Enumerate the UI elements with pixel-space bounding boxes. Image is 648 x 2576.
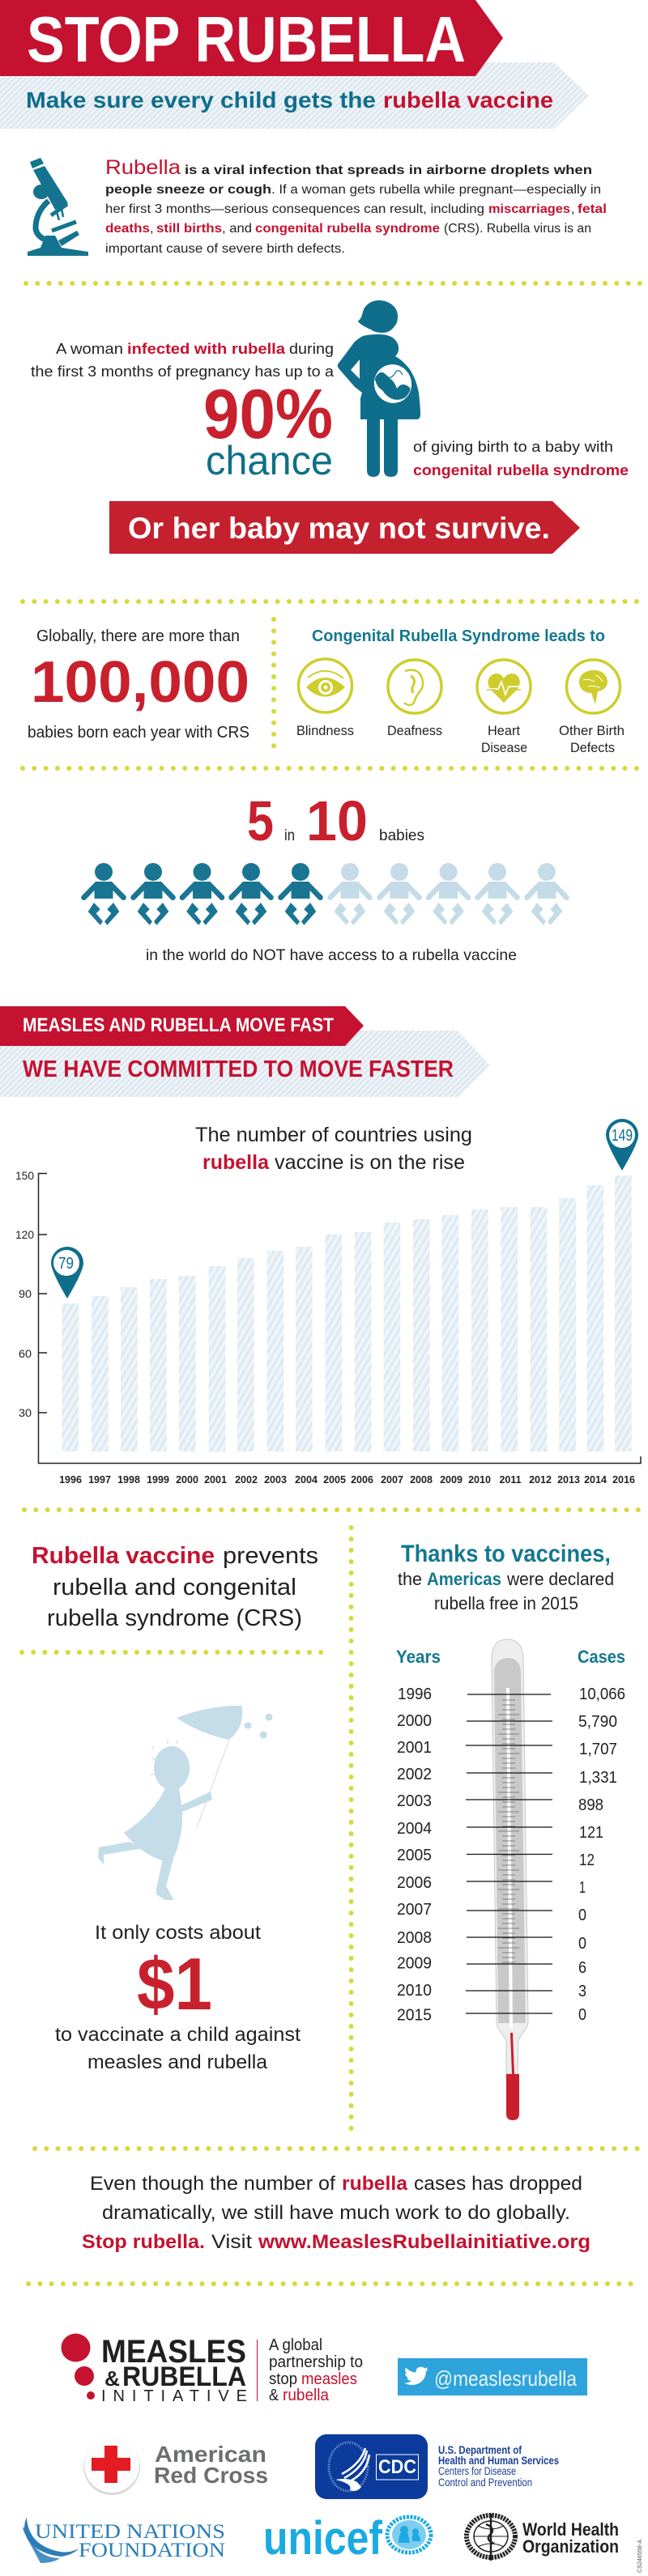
y axis labels	[15, 1169, 34, 1419]
logo: HHS CDC: Health and Human Services	[438, 2454, 559, 2467]
year column: 2004	[397, 1820, 432, 1838]
panel: global count	[28, 627, 249, 742]
icon: twitter bird	[404, 2367, 428, 2385]
year column	[397, 1685, 432, 2024]
logo: American Red Cross: American	[155, 2442, 266, 2467]
word: Rubella: Rubella	[105, 156, 181, 179]
year column: 2010	[397, 1982, 432, 2000]
WHO emblem	[467, 2514, 515, 2561]
subtitle text: Make sure every child gets the	[26, 87, 376, 113]
icon: pregnant woman	[338, 300, 420, 477]
chart title	[195, 1124, 472, 1174]
year column: 2009	[397, 1954, 432, 1972]
cases column: 0	[578, 1906, 586, 1924]
y axis labels: 120	[15, 1228, 34, 1241]
column heading: Cases: Cases	[578, 1647, 625, 1667]
logo: unicef: unicef	[263, 2512, 383, 2565]
intro paragraph: deaths	[105, 222, 150, 236]
unicef emblem	[387, 2517, 431, 2553]
section ribbon: committed to move faster	[0, 1031, 490, 1097]
chart title: rubella	[202, 1151, 270, 1174]
word: chance: chance	[206, 438, 333, 483]
intro paragraph: ,	[571, 202, 574, 216]
panel: vaccine prevents	[32, 1543, 318, 1631]
heading: Congenital Rubella Syndrome leads to	[312, 627, 605, 645]
intro paragraph: ,	[150, 222, 153, 236]
logo: HHS CDC: Centers for Disease	[438, 2464, 516, 2477]
babies with access	[327, 863, 569, 925]
statistic: 5 in 10 babies: 10	[306, 789, 368, 852]
cases column: 1,331	[579, 1769, 617, 1787]
cases column: 12	[579, 1851, 595, 1869]
icon: heart	[477, 660, 531, 713]
panel: vaccine prevents: Rubella vaccine	[32, 1543, 215, 1569]
illustration: child with butterfly net	[98, 1706, 272, 1900]
partnership tagline: partnership to	[269, 2353, 363, 2371]
twitter handle	[398, 2358, 587, 2395]
x axis labels: 2016	[612, 1474, 635, 1486]
red banner: may not survive	[109, 501, 580, 554]
icon labels: Other Birth	[559, 723, 625, 738]
HHS eagle	[335, 2448, 369, 2491]
x axis labels: 2013	[557, 1474, 580, 1486]
y axis labels: 60	[19, 1347, 32, 1360]
intro paragraph: . If a woman gets rubella while pregnant—especially in	[271, 183, 601, 197]
logo: World Health Organization	[467, 2514, 619, 2561]
cases column	[578, 1685, 625, 2024]
cost text: to vaccinate a child against	[55, 2024, 301, 2046]
year column: 2002	[397, 1766, 432, 1783]
cases column: 898	[578, 1796, 603, 1814]
panel: congenital rubella syndrome effects	[296, 627, 625, 755]
partnership tagline: rubella	[283, 2387, 330, 2404]
risk text: woman infected: A woman	[56, 340, 123, 357]
red banner: may not survive: Or her baby may not survive.	[128, 512, 550, 545]
cases column: 1	[579, 1879, 586, 1897]
panel: vaccine prevents: prevents	[223, 1543, 318, 1569]
section banner: measles and rubella move fast: MEASLES AND RUBELLA MOVE FAST	[23, 1014, 334, 1036]
chart title: The number of countries using	[195, 1124, 472, 1146]
big number: 100,000: 100,000	[31, 650, 249, 715]
partnership tagline: stop	[269, 2370, 297, 2388]
year column: 2008	[397, 1929, 432, 1947]
icon: ear	[388, 660, 441, 713]
x axis labels: 2002	[235, 1474, 258, 1486]
risk text: woman infected: infected with rubella	[127, 340, 286, 357]
logo: United Nations Foundation	[23, 2517, 225, 2563]
intro paragraph: important cause of severe birth defects.	[105, 242, 345, 256]
icon labels	[296, 723, 625, 755]
panel: vaccine prevents: rubella syndrome (CRS)	[47, 1605, 302, 1631]
logo: Measles and Rubella Initiative: RUBELLA	[122, 2361, 246, 2392]
intro paragraph: miscarriages	[488, 202, 570, 216]
intro paragraph: people sneeze or cough	[105, 183, 271, 197]
cases column: 6	[578, 1959, 586, 1977]
icon labels: Defects	[570, 740, 615, 755]
closing message: www.MeaslesRubellainitiative.org	[258, 2231, 590, 2253]
panel: Americas rubella free: the	[398, 1569, 422, 1589]
intro paragraph: fetal	[578, 202, 607, 216]
year column: 2006	[397, 1874, 432, 1892]
x axis labels: 2003	[264, 1474, 287, 1486]
cases column: 10,066	[579, 1685, 625, 1703]
closing message: Even though the number of	[90, 2173, 335, 2195]
pin: 79	[51, 1247, 83, 1299]
cases column: 1,707	[579, 1741, 617, 1758]
intro paragraph: congenital rubella syndrome	[255, 222, 440, 236]
partnership tagline: A global	[269, 2336, 322, 2354]
cases column: 121	[579, 1824, 603, 1842]
fetus in womb	[369, 359, 417, 408]
closing message	[82, 2173, 590, 2253]
year column: 2005	[397, 1847, 432, 1864]
x axis labels: 2010	[468, 1474, 491, 1486]
partnership tagline: measles	[301, 2370, 357, 2388]
x axis labels: 2014	[584, 1474, 607, 1486]
thermometer table	[396, 1639, 625, 2120]
title text: STOP RUBELLA	[27, 3, 466, 75]
section banner: measles and rubella move fast	[0, 1006, 364, 1046]
x axis labels: 2007	[381, 1474, 403, 1486]
logo: United Nations Foundation: UNITED NATIONS	[35, 2521, 225, 2543]
logo: HHS CDC: U.S. Department of	[438, 2443, 522, 2456]
panel: vaccine prevents: rubella and congenital	[53, 1575, 296, 1600]
year column: 2003	[397, 1792, 432, 1810]
risk text: birth outcome: congenital rubella syndrome	[413, 461, 629, 478]
bar chart: countries using rubella vaccine	[15, 1119, 641, 1486]
panel: Americas rubella free: Americas	[427, 1569, 501, 1589]
icon: brain	[567, 660, 620, 713]
y axis labels: 150	[15, 1169, 34, 1182]
cases column: 0	[578, 2006, 586, 2024]
scale lines	[466, 1694, 552, 2013]
pictogram: ten babies	[81, 863, 569, 925]
icon labels: Deafness	[387, 723, 442, 738]
intro paragraph	[105, 156, 607, 256]
risk text: woman infected: the first 3 months of pregnancy has up to a	[31, 363, 335, 380]
cases column: 0	[578, 1935, 586, 1953]
logo: Measles and Rubella Initiative	[62, 2333, 363, 2405]
icon labels: Heart	[488, 723, 520, 738]
panel: global count: babies born each year with CRS	[28, 724, 249, 742]
closing message: cases has dropped	[414, 2173, 582, 2195]
logo: Measles and Rubella Initiative: &	[104, 2366, 120, 2391]
cost text	[55, 1922, 301, 2073]
risk text: birth outcome: of giving birth to a baby with	[413, 438, 613, 455]
partnership tagline	[269, 2336, 363, 2404]
intro paragraph: (CRS). Rubella virus is an	[444, 222, 591, 236]
logo: United Nations Foundation: FOUNDATION	[79, 2540, 225, 2561]
year column: 2001	[397, 1739, 432, 1757]
big number: 90%: 90%	[203, 376, 333, 453]
x axis labels: 2011	[499, 1474, 522, 1486]
year column: 1996	[398, 1685, 432, 1703]
statistic: 5 in 10 babies: in	[284, 827, 295, 844]
logo: HHS CDC: Control and Prevention	[438, 2476, 532, 2489]
logo: HHS CDC	[315, 2434, 559, 2499]
pin: 79: 79	[58, 1255, 74, 1273]
CDC mark: CDC	[378, 2456, 416, 2478]
document code: CS246558-A	[636, 2540, 643, 2573]
intro paragraph: still births	[156, 222, 222, 236]
intro paragraph: is a viral infection that spreads in airborne droplets when	[185, 164, 592, 177]
year column: 2000	[397, 1712, 432, 1730]
y axis labels: 90	[19, 1287, 32, 1300]
x axis labels: 2006	[351, 1474, 373, 1486]
x axis labels: 2000	[176, 1474, 198, 1486]
panel: global count: Globally, there are more than	[36, 627, 240, 645]
closing message: Visit	[211, 2231, 252, 2253]
icon labels: Disease	[481, 740, 527, 755]
column heading: Years: Years	[396, 1647, 441, 1667]
bars	[62, 1175, 632, 1452]
closing message: dramatically, we still have much work to do globally.	[102, 2202, 570, 2224]
cases column: 5,790	[578, 1713, 617, 1731]
logo: American Red Cross: Red Cross	[154, 2463, 268, 2488]
subtitle text: rubella vaccine	[383, 87, 553, 113]
cost text: It only costs about	[95, 1922, 261, 1944]
logo: World Health Organization: World Health	[522, 2519, 619, 2540]
logo: Measles and Rubella Initiative: MEASLES	[101, 2334, 246, 2370]
panel: Americas rubella free: rubella free in 2015	[434, 1593, 578, 1613]
intro paragraph: her first 3 months—serious consequences can result, including	[105, 202, 484, 216]
twitter handle: @measlesrubella	[434, 2366, 577, 2391]
panel: Americas rubella free: Thanks to vaccines,	[401, 1541, 611, 1567]
statistic: 5 in 10 babies	[247, 789, 424, 852]
partnership tagline: &	[269, 2387, 279, 2404]
x axis labels: 2004	[295, 1474, 318, 1486]
x axis labels: 1998	[117, 1474, 140, 1486]
chart title: vaccine is on the rise	[275, 1151, 465, 1174]
icon: microscope	[28, 158, 88, 256]
statistic: 5 in 10 babies: babies	[379, 827, 424, 844]
subtitle ribbon	[0, 62, 589, 129]
panel: Americas rubella free: were declared	[506, 1569, 614, 1589]
icon: eye	[298, 659, 352, 712]
x axis labels: 2008	[410, 1474, 433, 1486]
risk text: woman infected: during	[289, 340, 334, 357]
axes	[39, 1174, 641, 1464]
closing message: rubella	[342, 2173, 407, 2195]
y axis labels: 30	[19, 1406, 32, 1419]
thermometer	[492, 1639, 528, 2120]
x axis labels: 1999	[147, 1474, 169, 1486]
x axis labels: 2012	[529, 1474, 552, 1486]
panel: Americas rubella free	[398, 1541, 614, 1613]
x axis labels: 2001	[204, 1474, 227, 1486]
risk text: birth outcome	[413, 438, 629, 478]
x axis labels: 2005	[323, 1474, 346, 1486]
section ribbon: committed to move faster: WE HAVE COMMITTED TO MOVE FASTER	[23, 1056, 454, 1082]
year column: 2015	[397, 2006, 432, 2024]
statistic caption: in the world do NOT have access to a rubella vaccine	[146, 946, 517, 964]
logo: American Red Cross	[83, 2438, 268, 2495]
cost text: measles and rubella	[87, 2051, 268, 2073]
x axis labels: 2009	[440, 1474, 463, 1486]
pin: 149	[606, 1119, 638, 1171]
risk text: woman infected	[31, 340, 335, 380]
x axis labels	[59, 1474, 635, 1486]
intro paragraph: , and	[222, 222, 252, 236]
x axis labels: 1997	[88, 1474, 111, 1486]
logo: Measles and Rubella Initiative: INITIATIVE	[101, 2387, 247, 2405]
closing message: Stop rubella.	[82, 2231, 205, 2253]
statistic: 5 in 10 babies: 5	[247, 789, 274, 852]
title banner	[0, 0, 503, 76]
pin: 149: 149	[612, 1127, 633, 1145]
subtitle text	[26, 87, 553, 113]
cases column: 3	[578, 1983, 586, 2000]
icon labels: Blindness	[296, 723, 354, 738]
big number: $1: $1	[137, 1944, 212, 2026]
section: pregnancy risk	[31, 300, 629, 483]
logo: World Health Organization: Organization	[522, 2536, 619, 2557]
babies without access	[81, 863, 323, 925]
x axis labels: 1996	[59, 1474, 82, 1486]
year column: 2007	[397, 1901, 432, 1919]
